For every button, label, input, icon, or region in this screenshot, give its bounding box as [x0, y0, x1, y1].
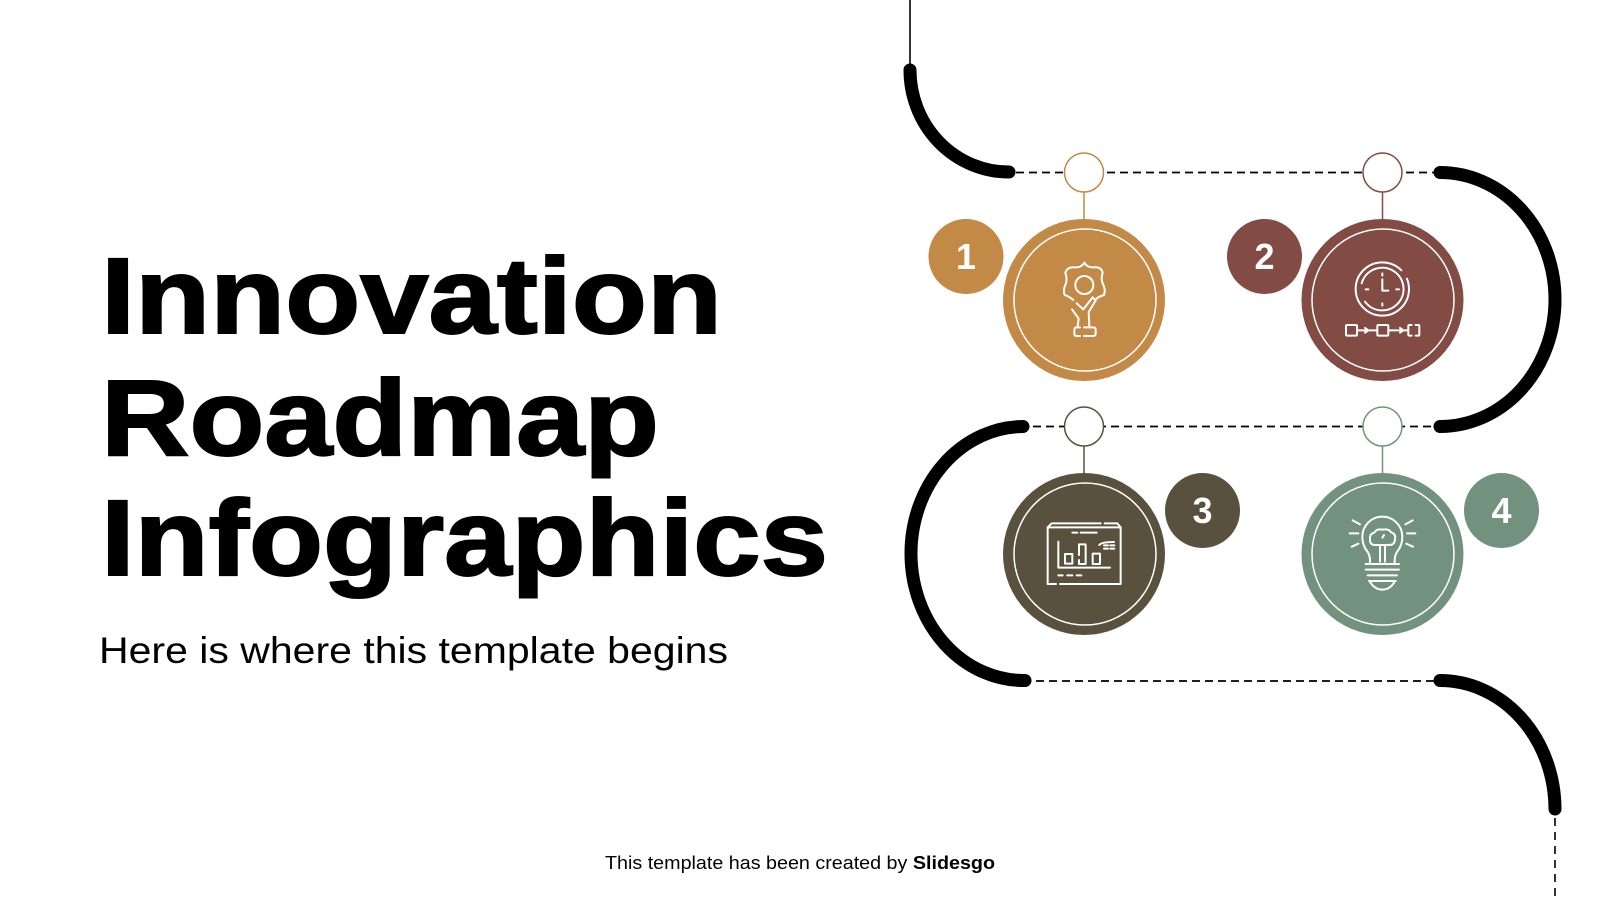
connector node 1: [1064, 153, 1104, 220]
number 1: 1: [956, 236, 976, 277]
dashed line: row 2: [1033, 426, 1436, 428]
step 1: [928, 153, 1165, 381]
step 2: [1227, 153, 1464, 381]
dashed line: exit: [1554, 818, 1556, 900]
ring 3: [1014, 483, 1156, 625]
subtitle: Here is where this template begins: [99, 630, 728, 671]
title: Infographics: [101, 477, 828, 598]
circle 1: [1003, 219, 1165, 381]
curve: bottom right: [1440, 680, 1555, 809]
ring 1: [1014, 229, 1156, 371]
number 3: 3: [1192, 490, 1213, 531]
circle 4: [1302, 473, 1464, 635]
badge 4: [1464, 473, 1539, 548]
badge 2: [1227, 219, 1302, 294]
dashed line: row 3: [1036, 680, 1436, 682]
circle 3: [1003, 473, 1165, 635]
curve: right: [1440, 172, 1555, 426]
icon: clock and process: [1346, 262, 1419, 336]
ring 4: [1312, 483, 1454, 625]
top connector line: [909, 0, 911, 66]
icon: chart window: [1048, 523, 1121, 584]
step 3: [1003, 407, 1240, 635]
circle 2: [1302, 219, 1464, 381]
number 2: 2: [1254, 236, 1275, 277]
icon: light bulb brain: [1350, 517, 1415, 590]
connector node 2: [1363, 153, 1402, 220]
connector node 3: [1064, 407, 1104, 474]
title: Roadmap: [101, 357, 659, 478]
ring 2: [1312, 229, 1454, 371]
badge 1: [928, 219, 1004, 294]
dashed line: row 1: [1016, 172, 1436, 174]
title: Innovation: [101, 235, 722, 356]
connector node 4: [1363, 407, 1402, 474]
footer credit: This template has been created by Slidesgo: [605, 853, 995, 873]
curve: left: [911, 426, 1025, 681]
curve: top left: [910, 70, 1009, 172]
step 4: [1302, 407, 1539, 635]
badge 3: [1165, 473, 1240, 548]
roadmap path: [910, 0, 1555, 900]
number 4: 4: [1491, 490, 1512, 531]
title: [101, 235, 828, 598]
icon: gear in hand: [1064, 263, 1105, 336]
